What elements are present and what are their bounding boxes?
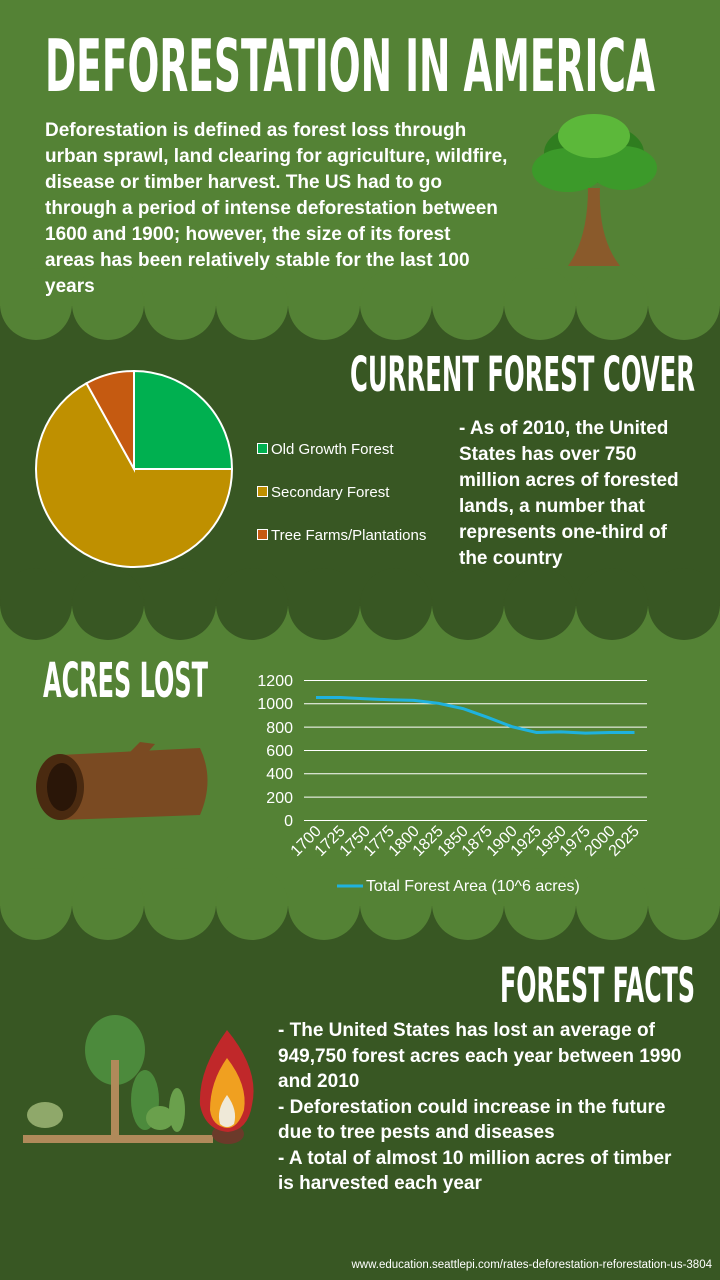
line chart: 1000 <box>257 696 293 713</box>
line chart: 2025 <box>606 823 643 860</box>
forest facts text: - A total of almost 10 million acres of timber <box>278 1148 671 1168</box>
icon: forest and fire <box>23 1015 254 1144</box>
forest facts text <box>278 1020 682 1194</box>
line chart <box>257 673 647 895</box>
forest facts text: and 2010 <box>278 1071 359 1092</box>
forest cover text: million acres of forested <box>459 470 679 491</box>
forest facts text: is harvested each year <box>278 1173 482 1194</box>
intro text: through a period of intense deforestation between <box>45 198 498 219</box>
line chart: 1700 <box>288 823 325 860</box>
line chart: 1800 <box>386 823 423 860</box>
line chart: 1775 <box>361 823 398 860</box>
line chart: 1850 <box>435 823 472 860</box>
legend: Old Growth Forest <box>271 441 394 458</box>
line chart: 400 <box>266 766 293 783</box>
line chart: 600 <box>266 743 293 760</box>
pie chart <box>35 370 233 568</box>
line chart: 1950 <box>533 823 570 860</box>
legend <box>257 441 426 544</box>
line chart: Total Forest Area (10^6 acres) <box>366 878 580 895</box>
line chart: 200 <box>266 790 293 807</box>
line chart: 1200 <box>257 673 293 690</box>
line chart: 1975 <box>557 823 594 860</box>
line chart: 2000 <box>582 823 619 860</box>
intro text: years <box>45 276 95 297</box>
line chart: 1825 <box>410 823 447 860</box>
forest facts text: due to tree pests and diseases <box>278 1122 555 1143</box>
intro text: areas has been relatively stable for the last 100 <box>45 250 470 271</box>
line chart: 800 <box>266 720 293 737</box>
forest facts text: 949,750 forest acres each year between 1990 <box>278 1046 682 1066</box>
forest cover text: lands, a number that <box>459 496 645 517</box>
source: www.education.seattlepi.com/rates-deforestation-reforestation-us-3804 <box>351 1259 712 1271</box>
forest cover text: - As of 2010, the United <box>459 418 668 439</box>
icon: log <box>36 742 208 820</box>
forest cover text <box>459 418 679 569</box>
line chart: 0 <box>284 813 293 830</box>
line chart: 1750 <box>337 823 374 860</box>
intro text: disease or timber harvest. The US had to go <box>45 172 442 193</box>
line chart: 1875 <box>459 823 496 860</box>
intro text: urban sprawl, land clearing for agriculture, wildfire, <box>45 146 507 167</box>
line chart: 1925 <box>508 823 545 860</box>
line chart: 1725 <box>312 823 349 860</box>
icon: tree <box>532 114 657 266</box>
forest cover text: represents one-third of <box>459 522 667 543</box>
forest facts text: - The United States has lost an average of <box>278 1020 655 1041</box>
legend: Secondary Forest <box>271 484 389 501</box>
intro text: Deforestation is defined as forest loss through <box>45 120 466 141</box>
forest cover text: the country <box>459 548 562 569</box>
line chart: 1900 <box>484 823 521 860</box>
legend: Tree Farms/Plantations <box>271 527 426 544</box>
intro text: 1600 and 1900; however, the size of its forest <box>45 224 450 245</box>
intro text <box>45 120 507 297</box>
forest cover text: States has over 750 <box>459 444 636 465</box>
forest facts text: - Deforestation could increase in the future <box>278 1096 665 1118</box>
